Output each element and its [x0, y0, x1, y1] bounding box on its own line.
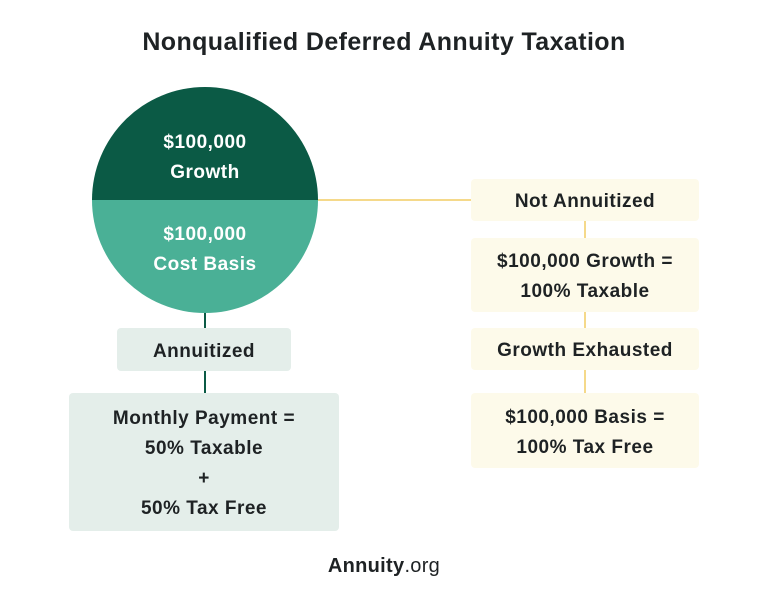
- right: growth taxable: [471, 238, 699, 312]
- footer logo: Annuity.org: [328, 555, 440, 577]
- cost basis half: Cost Basis: [153, 254, 257, 274]
- growth half: [92, 87, 318, 200]
- growth half: $100,000: [163, 132, 247, 152]
- left: monthly payment: [69, 393, 339, 531]
- right: not annuitized: [471, 179, 699, 221]
- left: annuitized: Annuitized: [153, 340, 255, 362]
- cost basis half: [92, 200, 318, 313]
- cost basis half: $100,000: [163, 224, 247, 244]
- growth half: Growth: [170, 162, 240, 182]
- right: growth exhausted: Growth Exhausted: [497, 340, 673, 361]
- circle chart: [92, 87, 318, 313]
- left: monthly payment: 50% Tax Free: [141, 498, 267, 519]
- left: monthly payment: Monthly Payment =: [113, 408, 295, 429]
- title: Nonqualified Deferred Annuity Taxation: [142, 28, 626, 56]
- right: basis tax free: $100,000 Basis =: [505, 406, 665, 428]
- right: growth taxable: $100,000 Growth =: [497, 251, 673, 272]
- left: monthly payment: +: [198, 468, 210, 489]
- right: basis tax free: 100% Tax Free: [516, 436, 654, 458]
- left: annuitized: [117, 328, 291, 371]
- right: growth taxable: 100% Taxable: [520, 281, 650, 302]
- right: not annuitized: Not Annuitized: [515, 191, 655, 212]
- right: basis tax free: [471, 393, 699, 468]
- right: growth exhausted: [471, 328, 699, 370]
- left: monthly payment: 50% Taxable: [145, 438, 263, 459]
